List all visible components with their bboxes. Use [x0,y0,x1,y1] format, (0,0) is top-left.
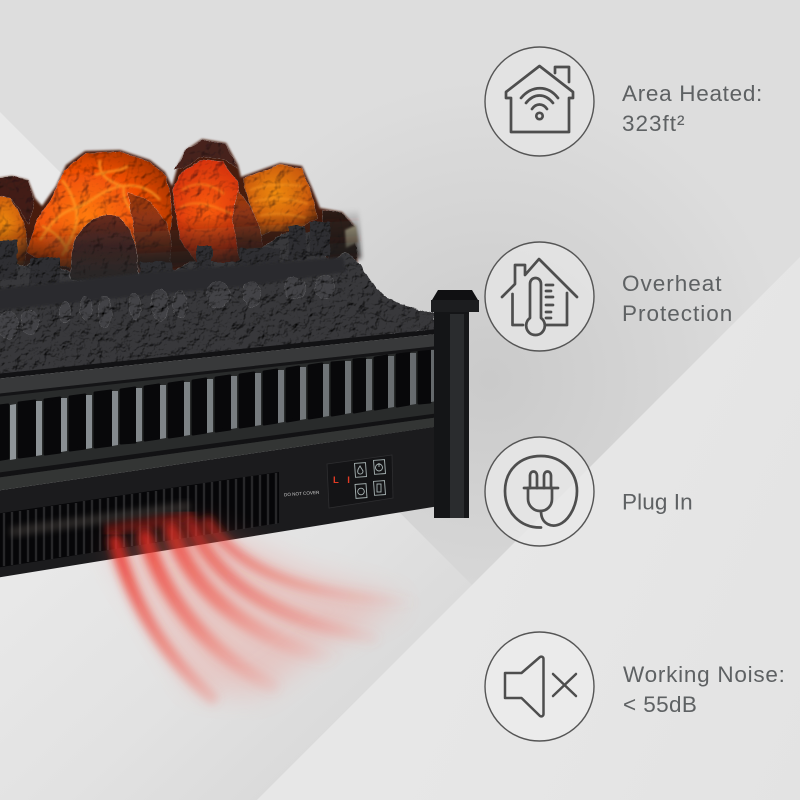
icon: house with thermometer [485,242,594,351]
dark rock bed [0,232,436,378]
fireplace log insert product [0,139,479,698]
grille bars [10,350,437,460]
label: area heated: 323ft² [622,111,686,136]
feature: plug in [485,437,693,546]
label: plug in: Plug In [622,490,693,514]
rock lumps [0,275,335,339]
rock ledge [0,257,346,312]
label: overheat protection: Overheat [622,271,723,296]
grille openings [0,351,430,461]
corner post [431,290,479,518]
do not cover label: DO NOT COVER [284,490,320,497]
label: working noise: < 55dB [623,692,697,717]
front log [70,215,138,282]
upper rail [0,328,447,397]
coal shadow [0,209,361,278]
touch buttons [355,460,385,498]
glowing logs [0,139,361,300]
label: overheat protection: Protection [622,301,733,326]
heat waves [105,522,415,698]
icon: house with wifi [485,47,594,156]
icon: power plug [485,437,594,546]
feature: working noise [485,632,786,741]
control panel [327,455,393,508]
lava veins [40,160,160,256]
lower rail [0,412,447,491]
feature: area heated [485,47,763,156]
base panel [0,425,447,578]
label: working noise [623,662,786,717]
grille frame [0,340,447,490]
feature: overheat protection [485,242,733,351]
icon: muted speaker [485,632,594,741]
label: overheat protection [622,271,733,326]
label: working noise: Working Noise: [623,662,786,687]
temperature readout: L I [333,475,353,486]
charred stumps [0,222,330,284]
heater vent [0,472,279,568]
label: area heated [622,81,763,136]
label: area heated: Area Heated: [622,81,763,106]
